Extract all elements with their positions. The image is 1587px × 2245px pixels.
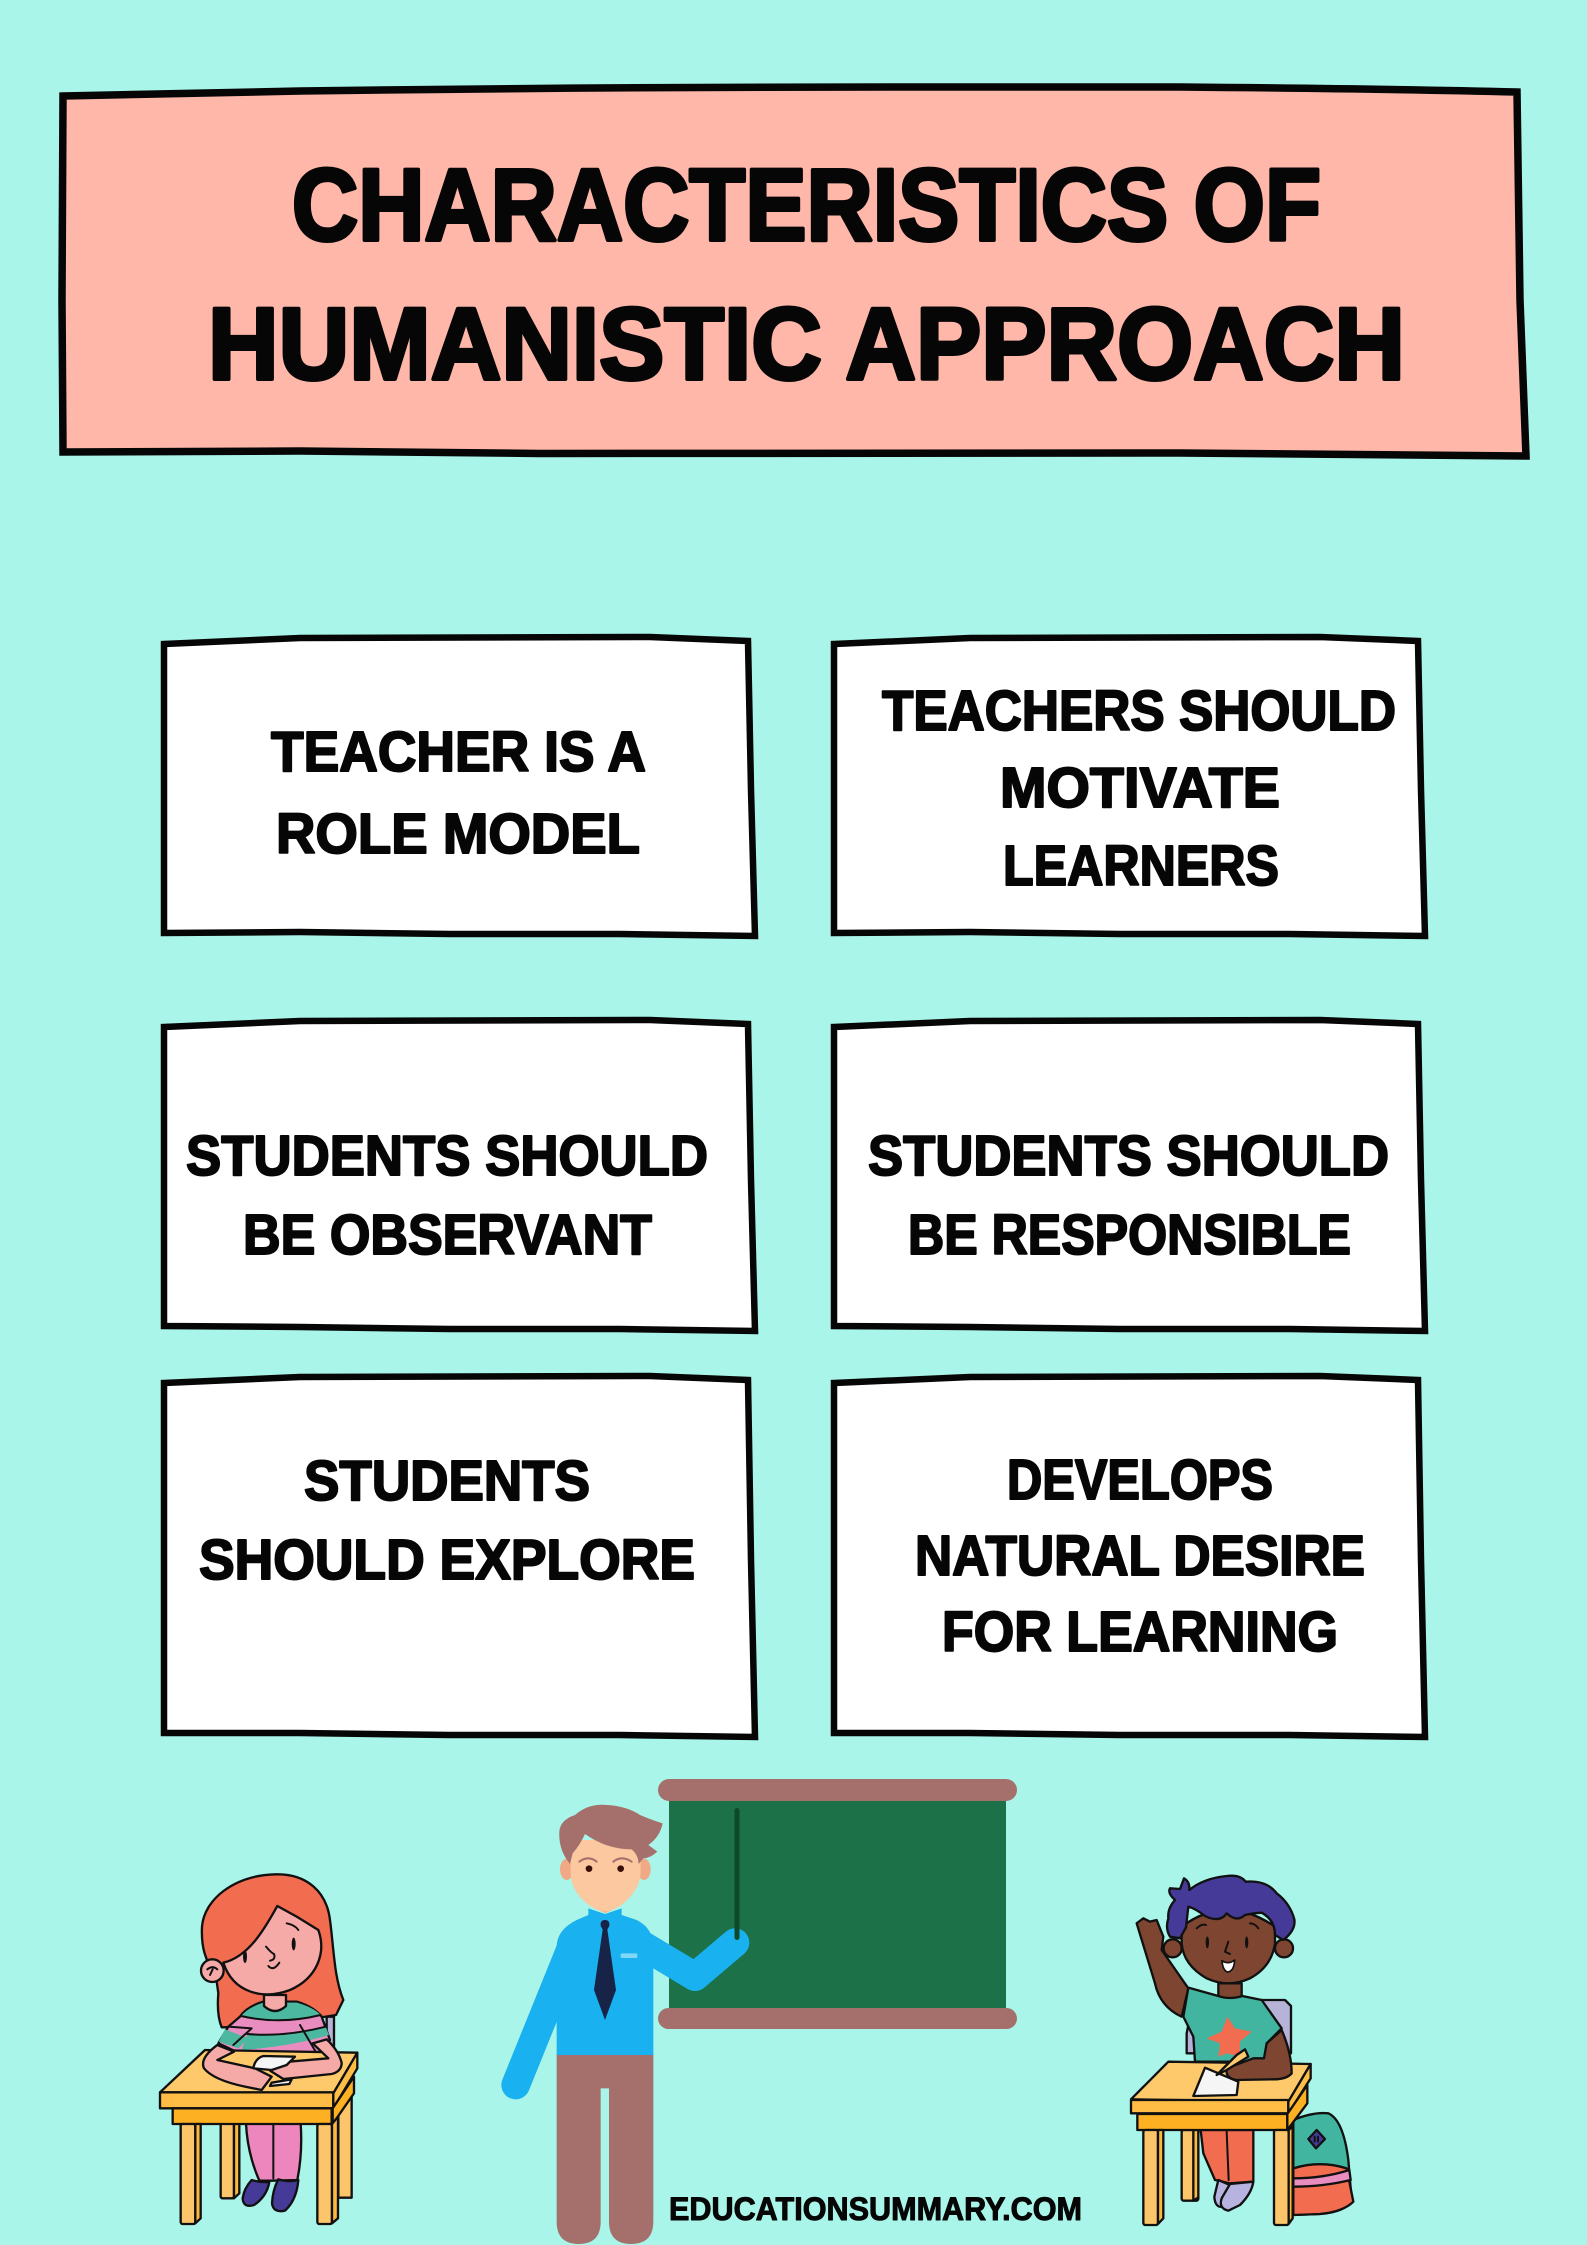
face (223, 1906, 321, 1994)
illustration: teacher (516, 1805, 735, 2244)
card: students should be observant: STUDENTS SHOULD (186, 1124, 708, 1188)
illustration: pointer (734, 1808, 740, 1940)
paper in hands (253, 2056, 295, 2070)
right arm (637, 1942, 735, 1977)
neck (264, 1995, 286, 2011)
card: students should explore: SHOULD EXPLORE (199, 1528, 695, 1592)
card: students should explore: STUDENTS (304, 1449, 590, 1513)
shirt stripes (241, 2003, 321, 2020)
face (1182, 1910, 1275, 1983)
front legs (181, 2124, 195, 2224)
card: students should be observant (164, 1020, 755, 1331)
desk top (1131, 2062, 1311, 2102)
arms (203, 2045, 272, 2090)
title banner (62, 87, 1526, 456)
card: teachers should motivate learners: LEARNERS (1003, 834, 1279, 898)
star (1207, 2017, 1252, 2057)
card: teachers should motivate learners: TEACHERS SHOULD (882, 679, 1396, 743)
trousers and socks (1201, 2130, 1253, 2183)
backpack (1293, 2113, 1352, 2215)
shirt (1183, 1988, 1282, 2062)
title line 1: CHARACTERISTICS OF (292, 148, 1321, 262)
card: teacher is a role model: ROLE MODEL (276, 802, 640, 866)
back leg (1182, 2130, 1198, 2201)
front legs (1143, 2130, 1158, 2225)
desk top (160, 2050, 357, 2093)
card: develops natural desire for learning: DEVELOPS (1007, 1448, 1273, 1512)
neck and head (595, 1893, 615, 1913)
card: students should explore (164, 1376, 755, 1737)
card: develops natural desire for learning (834, 1376, 1425, 1737)
paper (1193, 2068, 1238, 2096)
illustration: girl at desk (160, 1874, 357, 2224)
pencil (1217, 2049, 1248, 2075)
chair (1187, 2000, 1291, 2053)
title line 2: HUMANISTIC APPROACH (208, 287, 1405, 401)
card: teachers should motivate learners (834, 637, 1425, 936)
illustration: boy at desk with backpack (1131, 1876, 1353, 2225)
writing arm (1226, 2030, 1292, 2080)
card: students should be responsible: STUDENTS SHOULD (868, 1124, 1389, 1188)
card: teachers should motivate learners: MOTIVATE (1000, 756, 1280, 820)
card: teacher is a role model: TEACHER IS A (271, 720, 646, 784)
hair (1167, 1876, 1295, 1940)
hair (202, 1874, 343, 2027)
desk front (1131, 2100, 1288, 2113)
website footer: EDUCATIONSUMMARY.COM (669, 2191, 1082, 2227)
shirt (218, 2002, 330, 2055)
shirt (557, 1908, 653, 2055)
desk front (160, 2092, 333, 2108)
ears (1164, 1939, 1182, 1957)
card: students should be responsible (834, 1020, 1425, 1331)
card: teacher is a role model (164, 637, 755, 936)
neck (1218, 1983, 1242, 2000)
tie (594, 1920, 616, 2020)
raised arm (1137, 1918, 1188, 2017)
illustration: chalkboard (658, 1779, 1017, 2029)
eyes (586, 1865, 592, 1872)
trousers and shoes (246, 2123, 301, 2181)
pocket (621, 1953, 637, 1958)
left arm (516, 1947, 572, 2085)
back legs (221, 2123, 234, 2198)
trousers (557, 2053, 653, 2244)
chair back (327, 2017, 334, 2053)
ear (201, 1959, 224, 1982)
eyes and mouth (243, 1950, 247, 1963)
hair (559, 1805, 663, 1864)
card: develops natural desire for learning: FOR LEARNING (942, 1600, 1338, 1664)
facial features (1206, 1936, 1209, 1948)
eyebrows (579, 1858, 597, 1862)
card: students should be observant: BE OBSERVANT (243, 1203, 652, 1267)
card: students should be responsible: BE RESPONSIBLE (908, 1203, 1351, 1267)
card: develops natural desire for learning: NATURAL DESIRE (915, 1524, 1365, 1588)
